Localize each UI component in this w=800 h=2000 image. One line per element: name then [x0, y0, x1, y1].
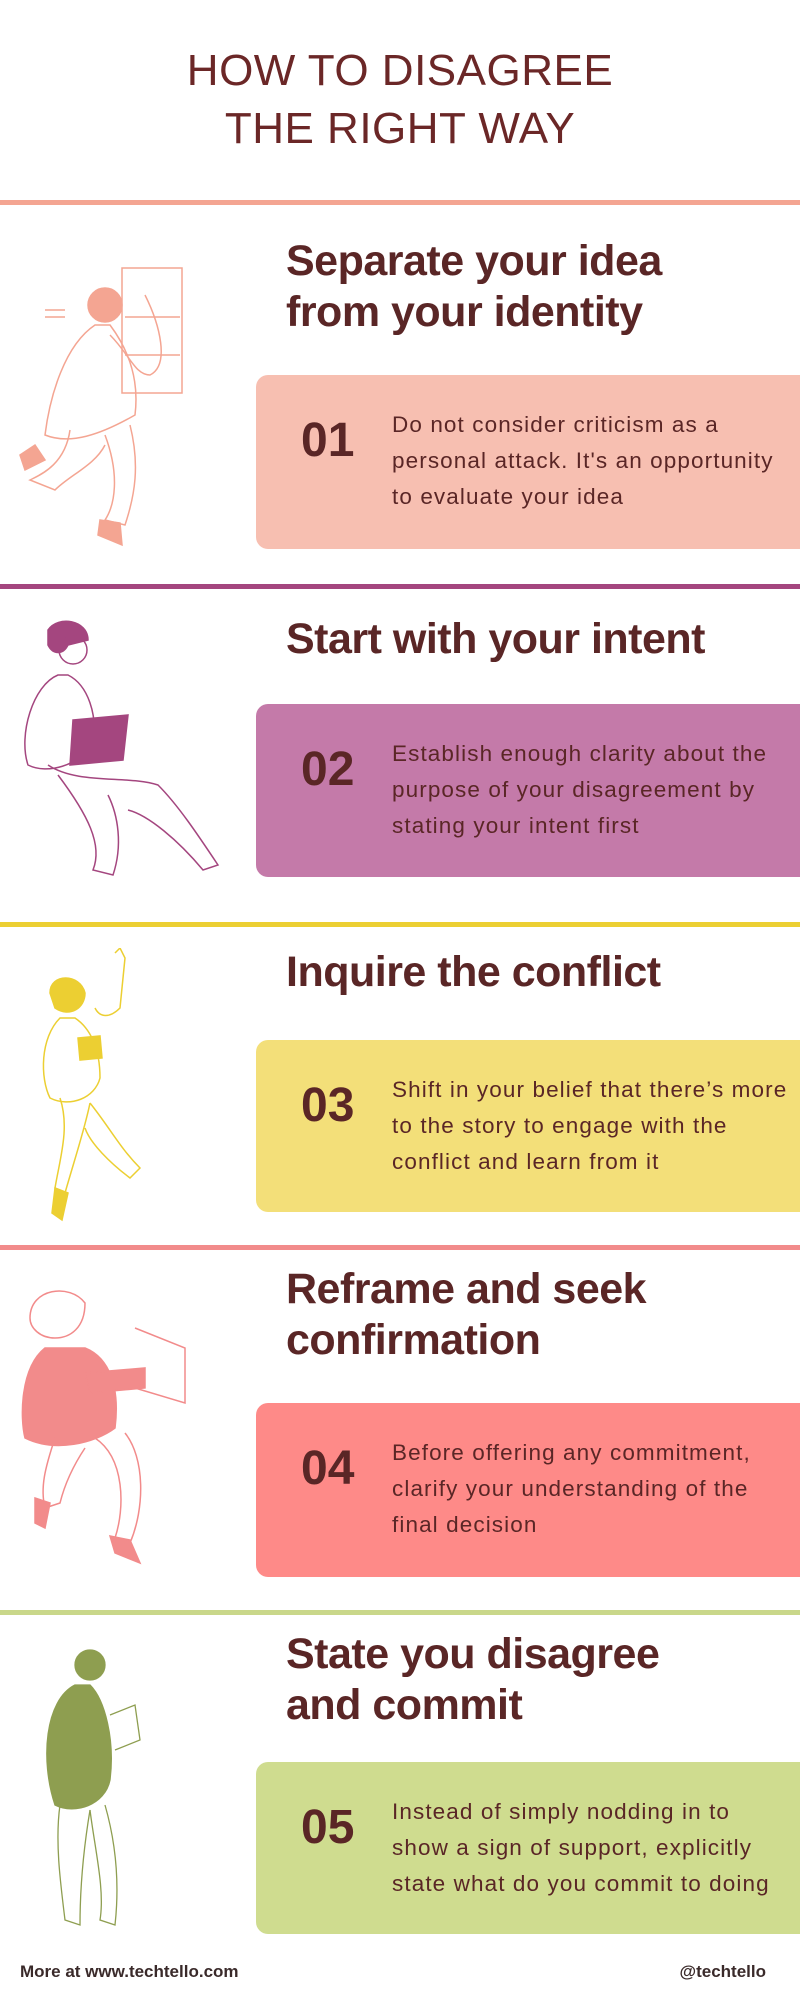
title: HOW TO DISAGREE	[187, 46, 613, 95]
illustration 5: person reading	[46, 1649, 141, 1926]
title: THE RIGHT WAY	[225, 104, 575, 153]
heading 2: Start with your intent	[286, 615, 705, 663]
heading 4: Reframe and seek	[286, 1265, 646, 1313]
text 01: Do not consider criticism as a	[392, 412, 719, 437]
text 02: Establish enough clarity about the	[392, 741, 767, 766]
divider 4	[0, 1245, 800, 1250]
text 04	[392, 1440, 751, 1537]
divider 5	[0, 1610, 800, 1615]
card 3	[256, 1040, 800, 1212]
heading 1: from your identity	[286, 288, 643, 336]
footer left: More at www.techtello.com	[20, 1962, 239, 1981]
number 05: 05	[301, 1801, 354, 1854]
text 03	[392, 1077, 787, 1174]
heading 4	[286, 1265, 646, 1364]
number 04: 04	[301, 1442, 354, 1495]
footer right: @techtello	[680, 1962, 766, 1981]
divider 1	[0, 200, 800, 205]
heading 1: Separate your idea	[286, 237, 662, 285]
text 04: final decision	[392, 1512, 537, 1537]
text 05: Instead of simply nodding in to	[392, 1799, 730, 1824]
divider 2	[0, 584, 800, 589]
title	[187, 46, 613, 153]
text 03: conflict and learn from it	[392, 1149, 659, 1174]
text 02: purpose of your disagreement by	[392, 777, 755, 802]
text 04: clarify your understanding of the	[392, 1476, 748, 1501]
divider 3	[0, 922, 800, 927]
illustration 4: person with laptop	[22, 1290, 186, 1564]
text 04: Before offering any commitment,	[392, 1440, 751, 1465]
card 4	[256, 1403, 800, 1577]
heading 5: State you disagree	[286, 1630, 659, 1678]
text 02	[392, 741, 767, 838]
text 05: show a sign of support, explicitly	[392, 1835, 752, 1860]
text 01	[392, 412, 774, 509]
text 01: to evaluate your idea	[392, 484, 624, 509]
illustration 2: person with laptop	[24, 620, 220, 876]
illustration 1: person at board	[19, 267, 183, 546]
illustration 3: person with book	[42, 948, 141, 1222]
text 02: stating your intent first	[392, 813, 640, 838]
text 05: state what do you commit to doing	[392, 1871, 770, 1896]
card 2	[256, 704, 800, 877]
card 1	[256, 375, 800, 549]
text 03: Shift in your belief that there’s more	[392, 1077, 787, 1102]
number 02: 02	[301, 743, 354, 796]
heading 5: and commit	[286, 1681, 522, 1729]
heading 5	[286, 1630, 659, 1729]
heading 1	[286, 237, 663, 336]
text 01: personal attack. It's an opportunity	[392, 448, 774, 473]
number 01: 01	[301, 414, 354, 467]
text 03: to the story to engage with the	[392, 1113, 728, 1138]
heading 4: confirmation	[286, 1316, 540, 1364]
number 03: 03	[301, 1079, 354, 1132]
card 5	[256, 1762, 800, 1934]
heading 3: Inquire the conflict	[286, 948, 661, 996]
text 05	[392, 1799, 770, 1896]
